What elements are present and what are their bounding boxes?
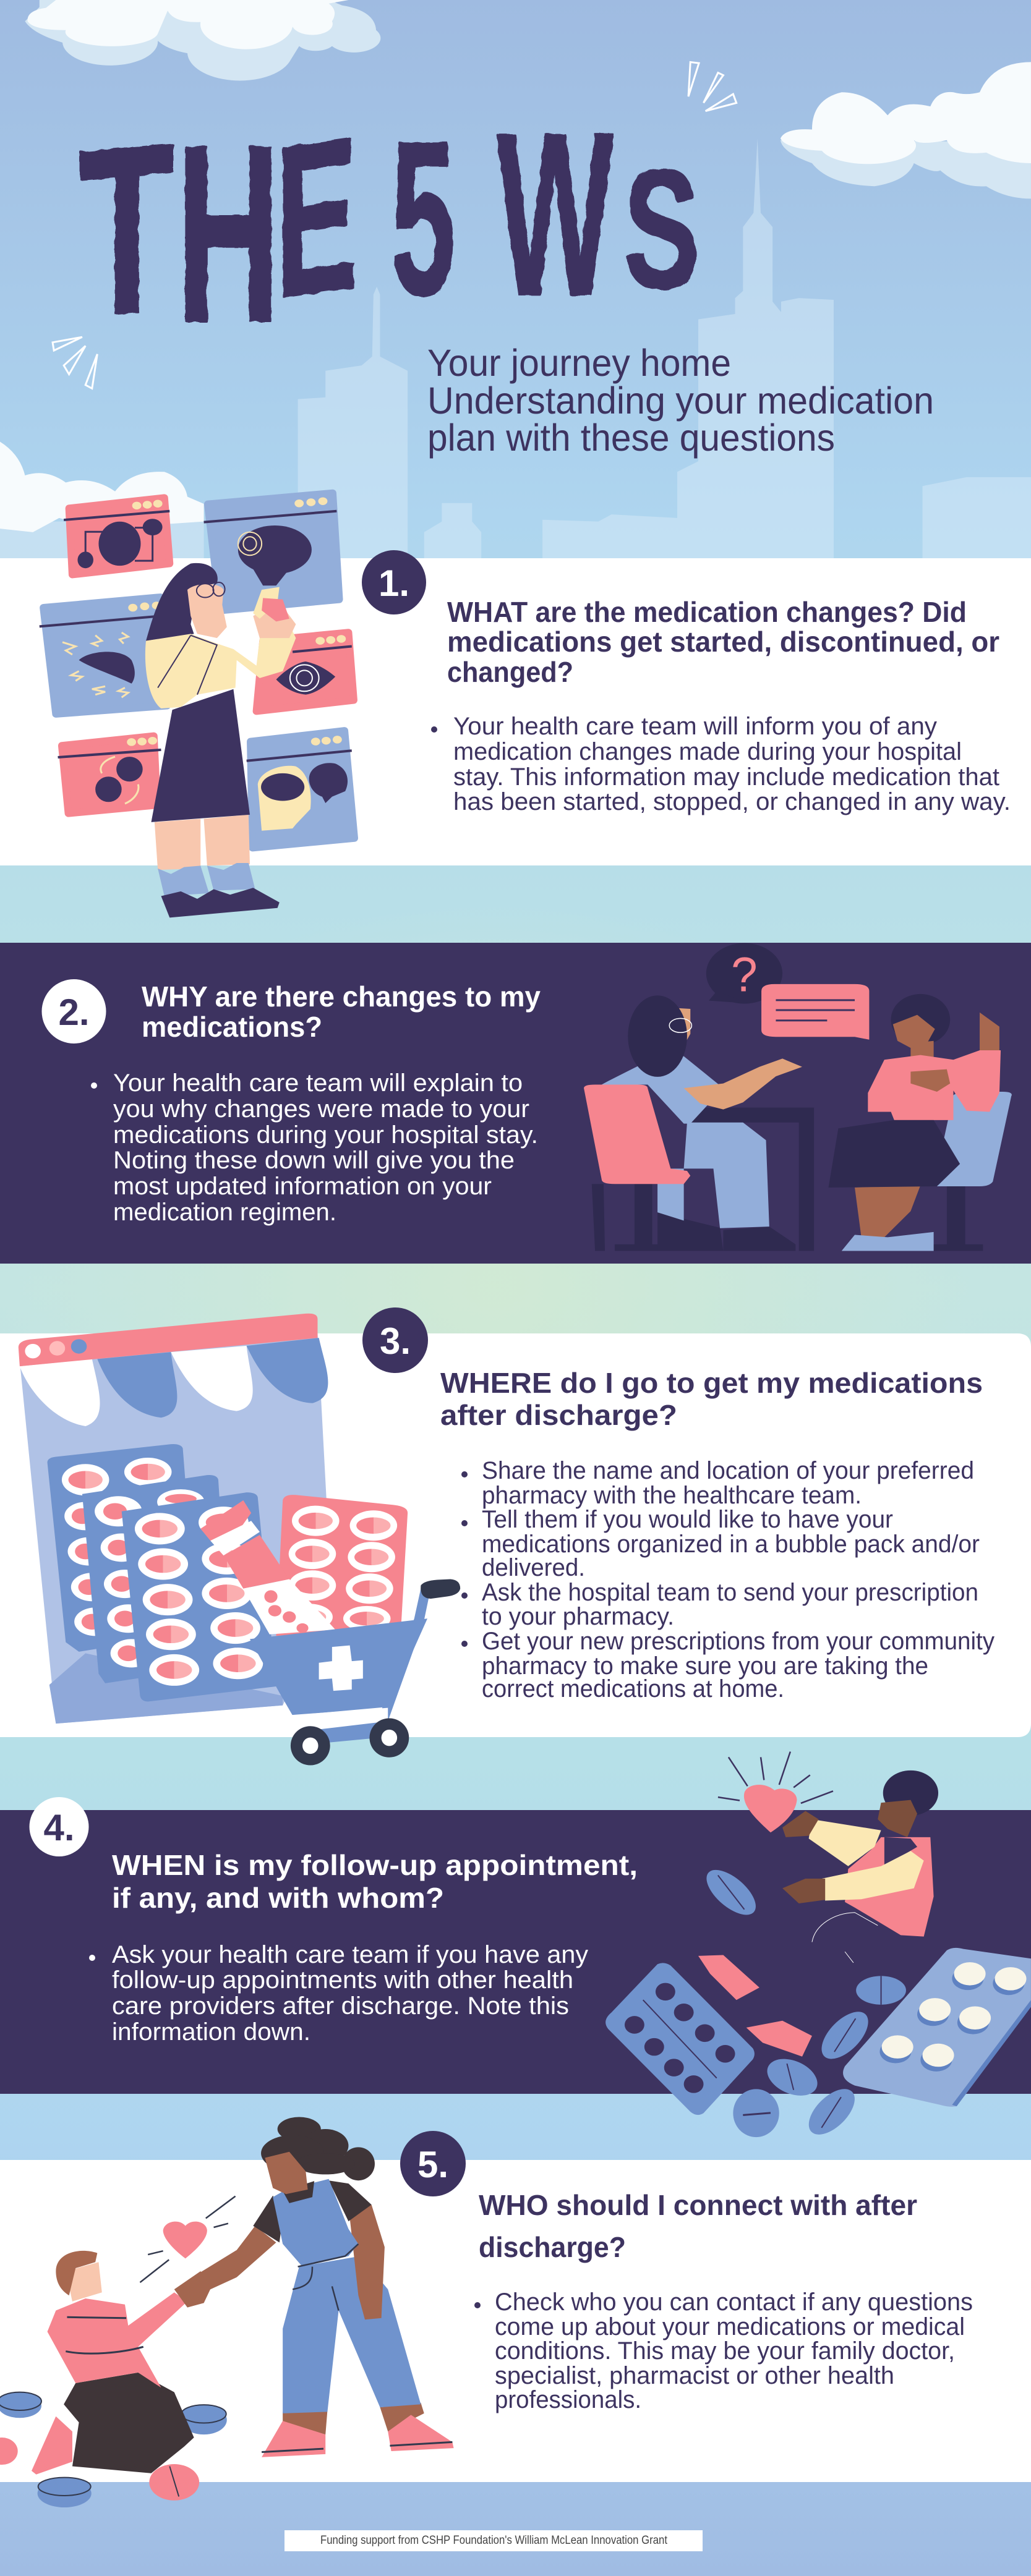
- title: H: [176, 93, 280, 375]
- loose pills: [696, 1868, 906, 2137]
- bullet text: most updated information on your: [113, 1173, 492, 1200]
- bullet text: follow-up appointments with other health: [112, 1966, 573, 1994]
- bullet list: [461, 1457, 995, 1702]
- heading: WHY are there changes to my: [142, 980, 541, 1013]
- pill packs: [48, 1444, 408, 1701]
- bullet text: Your health care team will inform you of any: [453, 713, 937, 740]
- store panel: [20, 1333, 332, 1724]
- bullet list: correct medications at home.: [482, 1675, 784, 1702]
- number badge 3: 3.: [380, 1320, 411, 1362]
- illustration: online pharmacy cart: [19, 1314, 460, 1766]
- loose pills: [0, 2392, 227, 2507]
- woman figure: [145, 563, 296, 917]
- standing woman: [197, 2117, 454, 2457]
- bullet text: care providers after discharge. Note this: [112, 1992, 569, 2020]
- footer: funding note: Funding support from CSHP Foundation's William McLean Innovation Grant: [320, 2534, 668, 2547]
- bullet text: information down.: [112, 2018, 310, 2046]
- heading: medications?: [142, 1011, 322, 1043]
- illustration: two women talking: [584, 943, 1012, 1251]
- number badge 2: 2.: [58, 992, 90, 1033]
- bullet text: [431, 713, 1011, 815]
- panel: when: [0, 1751, 1031, 2137]
- subtitle: Understanding your medication: [427, 380, 934, 422]
- bullet text: [474, 2289, 973, 2413]
- blister pack dark: [605, 1963, 755, 2115]
- bullet text: Check who you can contact if any questions: [495, 2289, 973, 2316]
- subtitle: Your journey home: [427, 342, 731, 384]
- title: 5: [391, 96, 456, 340]
- number badge 1: [362, 550, 426, 614]
- blister pack light: [843, 1948, 1031, 2107]
- number badge 2: [42, 979, 106, 1044]
- heading: changed?: [447, 656, 573, 688]
- bullet list: Share the name and location of your preferred: [482, 1457, 974, 1484]
- heading: if any, and with whom?: [112, 1882, 444, 1914]
- bullet text: Noting these down will give you the: [113, 1147, 515, 1174]
- bullet list: pharmacy with the healthcare team.: [482, 1482, 862, 1509]
- bullet list: delivered.: [482, 1554, 585, 1581]
- title: S: [623, 134, 699, 324]
- city skyline: [298, 138, 1031, 559]
- subtitle: plan with these questions: [427, 417, 835, 459]
- bullet text: has been started, stopped, or changed in any way.: [453, 788, 1011, 815]
- right woman: [829, 994, 1012, 1251]
- bullet text: [89, 1941, 588, 2046]
- bullet text: professionals.: [495, 2386, 641, 2413]
- footer: funding note: [284, 2530, 703, 2551]
- pink speech bubble: [761, 984, 869, 1040]
- person with heart: [782, 1770, 938, 1963]
- window: brain and gears: [64, 498, 169, 574]
- number badge 4: 4.: [43, 1807, 75, 1848]
- question bubble: [706, 943, 782, 1004]
- bullet text: you why changes were made to your: [113, 1095, 529, 1123]
- subtitle: [427, 342, 934, 459]
- illustration: person holding heart and pills: [605, 1751, 1031, 2137]
- heading: [440, 1367, 983, 1431]
- number badge 5: [400, 2131, 466, 2196]
- heading: [112, 1849, 638, 1914]
- awning: [19, 1314, 328, 1426]
- bullet text: come up about your medications or medical: [495, 2313, 965, 2340]
- table and chair legs: [592, 1108, 983, 1251]
- heading: WHAT are the medication changes? Did: [447, 596, 967, 628]
- cloud: top right: [781, 62, 1031, 198]
- illustration: helping hand: [0, 2117, 454, 2507]
- window: eye: [257, 632, 354, 711]
- title: E: [275, 90, 357, 344]
- bullet list: Get your new prescriptions from your community: [482, 1628, 995, 1655]
- window: moods: [58, 736, 161, 814]
- bullet text: Your health care team will explain to: [113, 1069, 523, 1097]
- heading: WHEN is my follow-up appointment,: [112, 1849, 638, 1881]
- bullet list: Tell them if you would like to have your: [482, 1506, 893, 1533]
- heading: discharge?: [479, 2231, 626, 2263]
- bullet text: [91, 1069, 538, 1226]
- heart rays: [718, 1751, 833, 1803]
- kneeling man: [32, 2251, 212, 2475]
- illustration: woman with brain windows: [40, 493, 354, 917]
- panel: why: [0, 943, 1031, 1264]
- heading: medications get started, discontinued, or: [447, 626, 999, 658]
- bullet text: Ask your health care team if you have any: [112, 1941, 588, 1968]
- heading: [479, 2189, 917, 2263]
- heart: [744, 1785, 797, 1832]
- sparkle: left: [53, 337, 97, 388]
- cloud: bottom left: [0, 442, 204, 559]
- bullet text: specialist, pharmacist or other health: [495, 2362, 894, 2389]
- pill bottle: [200, 1500, 335, 1634]
- heading: WHERE do I go to get my medications: [440, 1367, 983, 1399]
- heading: [142, 980, 541, 1043]
- bullet text: stay. This information may include medication that: [453, 763, 999, 791]
- bullet list: medications organized in a bubble pack and/or: [482, 1531, 980, 1558]
- heading: WHO should I connect with after: [479, 2189, 917, 2221]
- heading: after discharge?: [440, 1399, 677, 1431]
- panel: where: [0, 1307, 1031, 1766]
- bullet list: Ask the hospital team to send your prescription: [482, 1579, 978, 1606]
- left woman: [584, 995, 802, 1251]
- question bubble: ?: [731, 946, 758, 1002]
- title: T: [79, 93, 174, 368]
- number badge 5: 5.: [417, 2144, 448, 2185]
- sparkle: top: [688, 62, 737, 111]
- bullet text: medication changes made during your hospital: [453, 738, 962, 765]
- bullet text: medications during your hospital stay.: [113, 1121, 538, 1149]
- panel: what: [0, 493, 1031, 917]
- heart and rays: [140, 2196, 236, 2282]
- window: brain target: [204, 493, 340, 610]
- heading: [447, 596, 999, 688]
- number badge 3: [362, 1307, 428, 1373]
- cloud: top left: [25, 0, 380, 80]
- title: [79, 85, 699, 375]
- shopping cart: [250, 1579, 460, 1766]
- window: head with thought: [247, 731, 354, 848]
- number badge 1: 1.: [379, 563, 409, 604]
- panel: who: [0, 2117, 1031, 2507]
- bullet text: conditions. This may be your family doctor,: [495, 2337, 955, 2365]
- window: liver and sparks: [40, 597, 167, 714]
- bullet text: medication regimen.: [113, 1199, 336, 1226]
- number badge 4: [30, 1797, 89, 1856]
- title: W: [497, 85, 615, 344]
- bullet list: to your pharmacy.: [482, 1603, 674, 1630]
- bullet list: pharmacy to make sure you are taking the: [482, 1652, 928, 1680]
